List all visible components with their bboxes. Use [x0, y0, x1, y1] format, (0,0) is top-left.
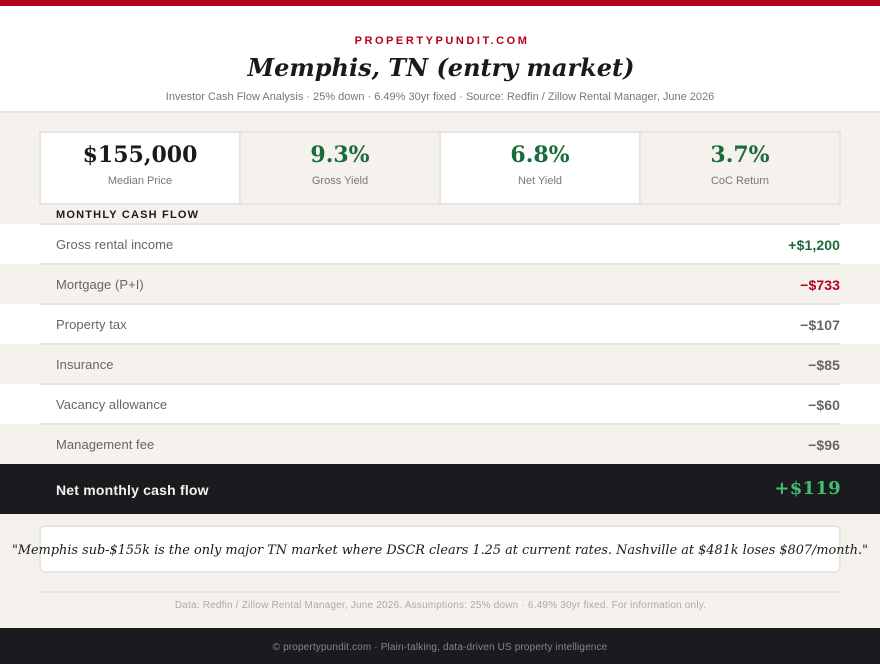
- KPI: net yield: Net Yield: [518, 175, 562, 187]
- row: management fee: −$96: [808, 437, 840, 453]
- KPI: net yield: 6.8%: [510, 142, 570, 168]
- KPI: gross yield: [239, 131, 441, 205]
- header panel: [0, 6, 880, 113]
- KPI: median price: Median Price: [108, 175, 172, 187]
- footnote: Data: Redfin / Zillow Rental Manager, June 2026. Assumptions: 25% down · 6.49% 30yr fixed. For information only.: [175, 600, 706, 611]
- row: property tax: [0, 304, 880, 344]
- row: gross rental income: Gross rental income: [56, 237, 173, 252]
- quote box: [39, 525, 841, 573]
- KPI: CoC return: CoC Return: [711, 175, 769, 187]
- row: vacancy allowance: Vacancy allowance: [56, 397, 167, 412]
- row: management fee: [0, 424, 880, 464]
- KPI: CoC return: 3.7%: [710, 142, 770, 168]
- net cash flow band: [0, 464, 880, 514]
- subtitle: Investor Cash Flow Analysis · 25% down · 6.49% 30yr fixed · Source: Redfin / Zillow Rental Manager, June 2026: [166, 91, 714, 103]
- row: mortgage: −$733: [800, 277, 840, 293]
- KPI: CoC return: [639, 131, 841, 205]
- net value: +$119: [774, 478, 841, 499]
- footer text: © propertypundit.com · Plain-talking, data-driven US property intelligence: [273, 642, 607, 653]
- KPI: net yield: [439, 131, 641, 205]
- row: insurance: Insurance: [56, 357, 114, 372]
- row: gross rental income: [0, 224, 880, 264]
- row: property tax: Property tax: [56, 317, 127, 332]
- row: insurance: [0, 344, 880, 384]
- KPI: median price: [39, 131, 241, 205]
- KPI: gross yield: Gross Yield: [312, 175, 368, 187]
- row: mortgage: [0, 264, 880, 304]
- net label: Net monthly cash flow: [56, 482, 209, 498]
- row: vacancy allowance: [0, 384, 880, 424]
- footnote rule and text: [40, 591, 840, 613]
- footer bar: [0, 628, 880, 664]
- row: property tax: −$107: [800, 317, 840, 333]
- row: management fee: Management fee: [56, 437, 154, 452]
- row: vacancy allowance: −$60: [808, 397, 840, 413]
- KPI: gross yield: 9.3%: [310, 142, 370, 168]
- top accent bar: [0, 0, 880, 6]
- row: insurance: −$85: [808, 357, 840, 373]
- KPI: median price: $155,000: [83, 142, 197, 168]
- section heading: MONTHLY CASH FLOW: [56, 209, 199, 221]
- brand label: PROPERTYPUNDIT.COM: [355, 35, 529, 47]
- title: Memphis, TN (entry market): [248, 53, 634, 82]
- row: mortgage: Mortgage (P+I): [56, 277, 144, 292]
- quote text: "Memphis sub-$155k is the only major TN market where DSCR clears 1.25 at current rates. Nashville at $481k loses $807/month.": [12, 543, 868, 558]
- row: gross rental income: +$1,200: [788, 237, 840, 253]
